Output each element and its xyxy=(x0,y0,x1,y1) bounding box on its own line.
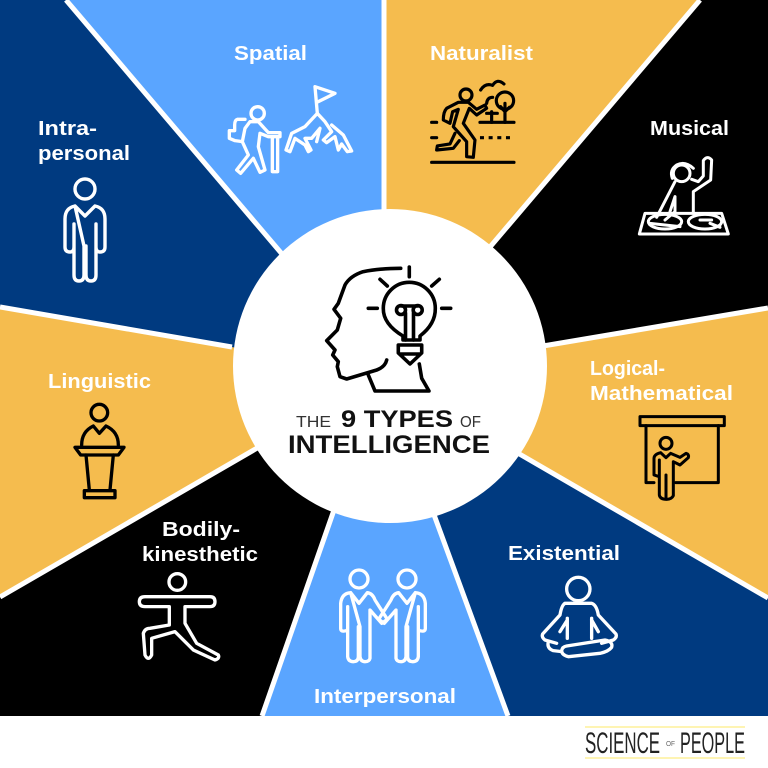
label: spatial: Spatial xyxy=(234,43,307,65)
label: bodily-kinesthetic: Bodily- xyxy=(162,519,240,541)
label: naturalist: Naturalist xyxy=(430,43,533,65)
icon: warrior pose figure xyxy=(139,574,219,660)
label: intra-personal: Intra- xyxy=(38,118,97,140)
icon: presenter at screen xyxy=(640,417,724,499)
title xyxy=(288,406,490,459)
panel: intra-personal xyxy=(0,0,390,366)
panel: logical-mathematical xyxy=(390,308,768,598)
logo: science of people: SCIENCE xyxy=(585,727,660,760)
panel: linguistic xyxy=(0,307,390,597)
logo: science of people: OF xyxy=(666,741,675,748)
label: musical: Musical xyxy=(650,118,729,140)
icon: standing person xyxy=(65,179,105,281)
title: 9 TYPES xyxy=(341,406,453,433)
icon: runner in nature xyxy=(432,81,514,162)
panel: spatial xyxy=(66,0,390,366)
label: interpersonal: Interpersonal xyxy=(314,686,456,708)
icon: two people holding hands xyxy=(341,570,425,662)
center circle xyxy=(233,209,547,523)
panel: musical xyxy=(390,0,768,366)
title: THE xyxy=(296,414,331,431)
icon: meditating person xyxy=(542,577,616,657)
panel: bodily-kinesthetic xyxy=(0,366,390,716)
label: bodily-kinesthetic: kinesthetic xyxy=(142,544,258,566)
label: logical-mathematical: Logical- xyxy=(590,358,665,380)
panel: existential xyxy=(390,366,768,716)
icon: head with lightbulb xyxy=(327,267,451,391)
icon: speaker at podium xyxy=(75,404,124,498)
label: logical-mathematical: Mathematical xyxy=(590,383,733,405)
panel: interpersonal xyxy=(262,366,508,716)
title: OF xyxy=(460,414,481,431)
title: INTELLIGENCE xyxy=(288,431,490,459)
icon: hiker and climber xyxy=(229,87,352,173)
label: intra-personal: personal xyxy=(38,143,130,165)
icon: DJ at turntables xyxy=(639,158,728,234)
label: linguistic: Linguistic xyxy=(48,371,151,393)
label: existential: Existential xyxy=(508,543,620,565)
panel: naturalist xyxy=(384,0,700,366)
